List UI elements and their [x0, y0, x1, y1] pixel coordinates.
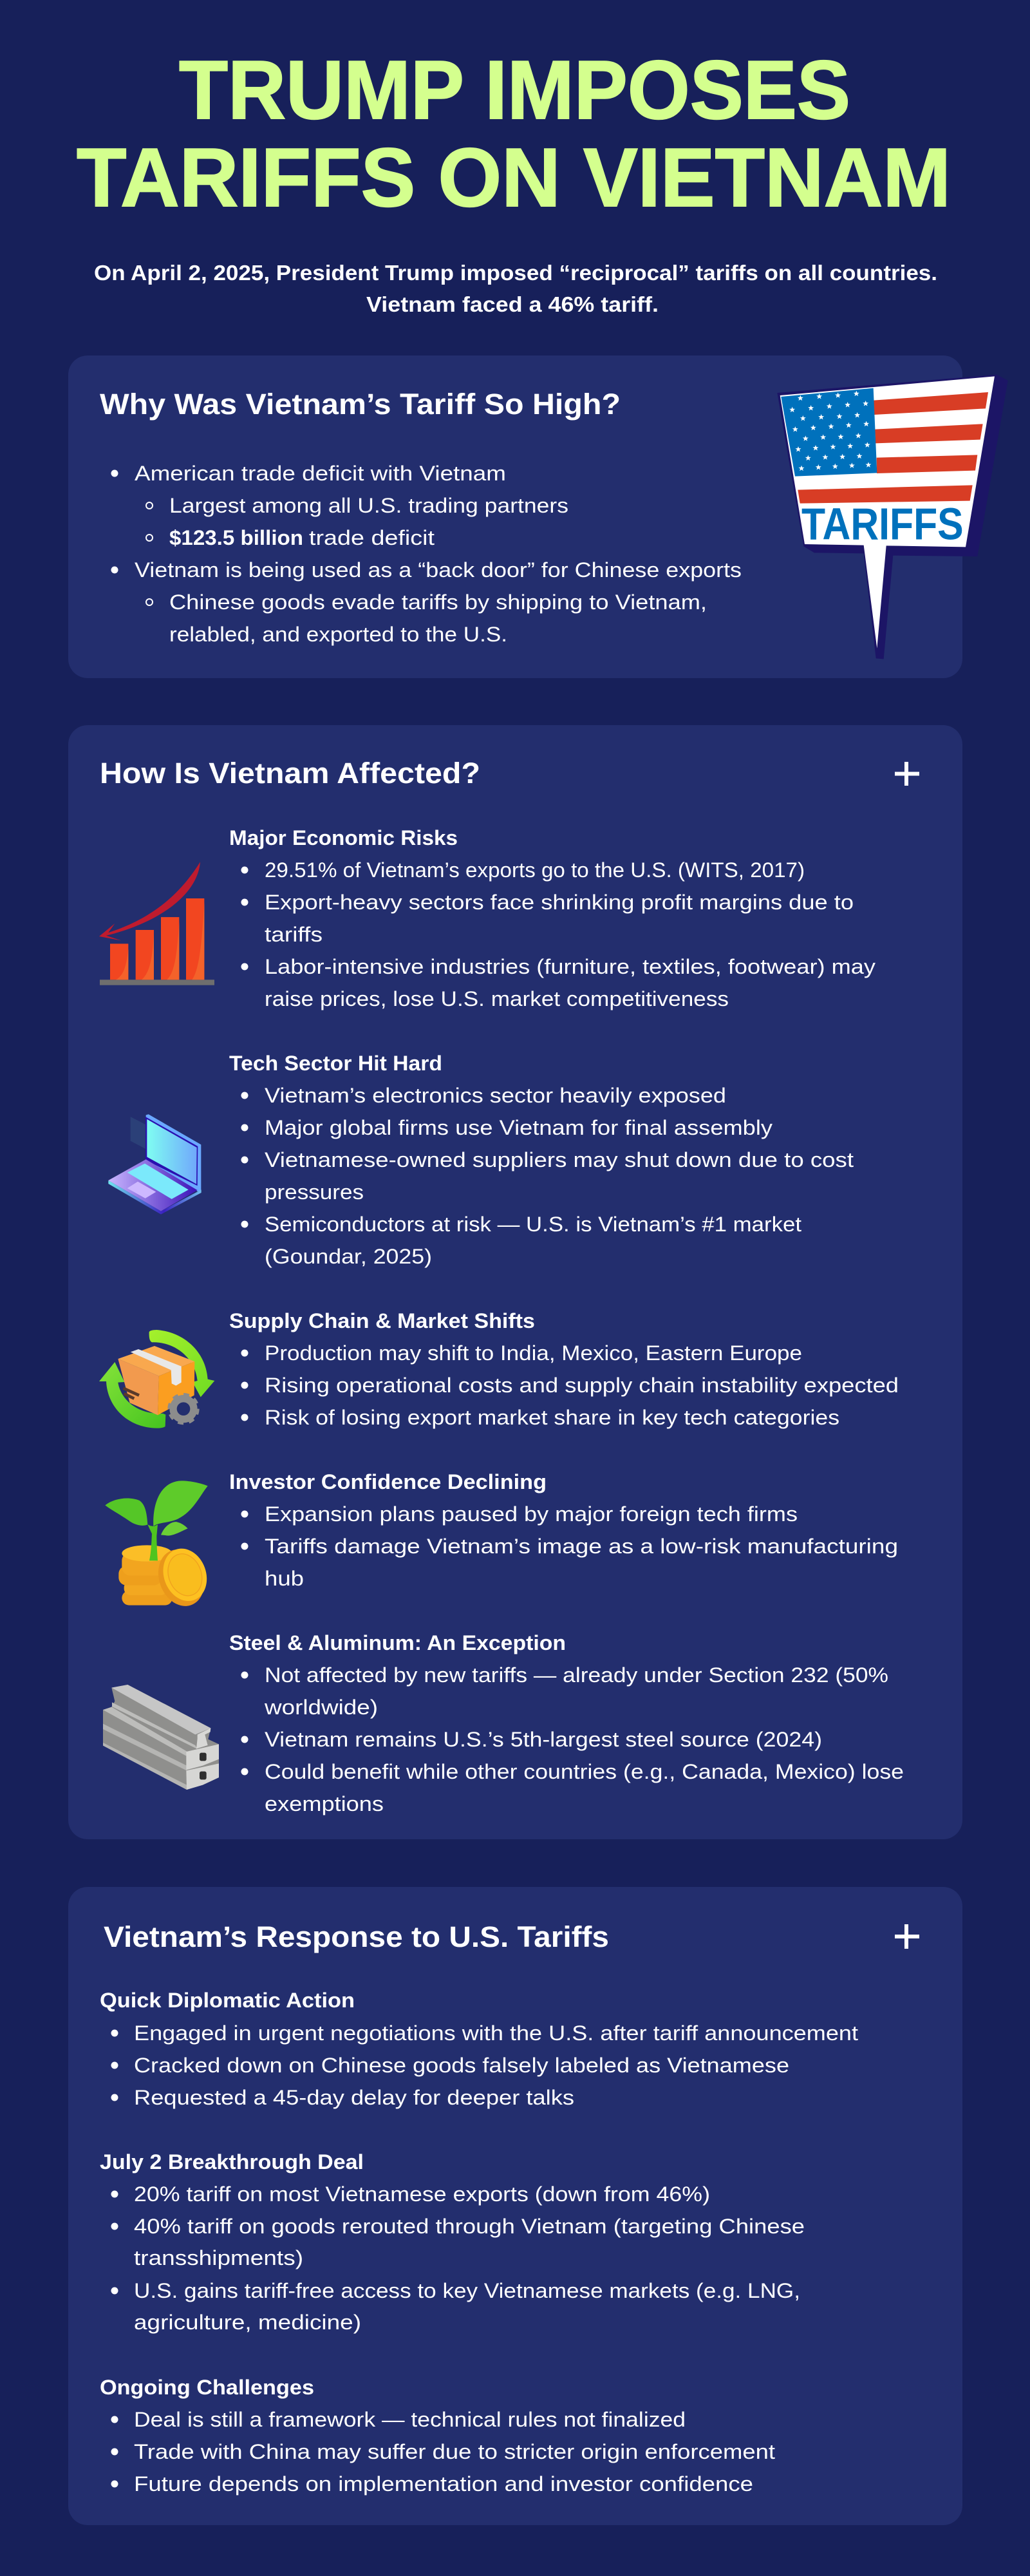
text: tech sector hit hard: Vietnamese-owned suppliers may shut down due to cost	[265, 1148, 854, 1171]
text: steel and aluminum exception	[229, 1631, 904, 1815]
text: july 2 breakthrough deal: transshipments)	[134, 2246, 303, 2269]
text: investor confidence declining: Tariffs damage Vietnam’s image as a low-risk manufacturing	[265, 1535, 898, 1558]
subtitle: On April 2, 2025, President Trump imposed “reciprocal” tariffs on all countries.	[94, 261, 937, 285]
text: major economic risks: tariffs	[265, 923, 323, 946]
text: tech sector hit hard	[229, 1052, 854, 1268]
text: steel and aluminum exception: exemptions	[265, 1792, 384, 1815]
text: major economic risks: Major Economic Risks	[229, 826, 458, 849]
subtitle: Vietnam faced a 46% tariff.	[366, 292, 659, 316]
panel: vietnam's response	[68, 1887, 962, 2525]
text: quick diplomatic action: Requested a 45-day delay for deeper talks	[134, 2086, 574, 2109]
text: supply chain and market shifts: Supply Chain & Market Shifts	[229, 1309, 535, 1332]
text: quick diplomatic action: Engaged in urgent negotiations with the U.S. after tariff announcement	[134, 2022, 858, 2045]
text: steel and aluminum exception: Could benefit while other countries (e.g., Canada, Mexico) lose	[265, 1760, 904, 1783]
title: TRUMP IMPOSES	[179, 44, 850, 137]
title	[77, 44, 951, 224]
text: supply chain and market shifts: Rising operational costs and supply chain instability expected	[265, 1374, 899, 1397]
icon: tariffs flag sign: TARIFFS	[801, 499, 964, 549]
text: steel and aluminum exception: Steel & Aluminum: An Exception	[229, 1631, 566, 1654]
text: ongoing challenges: Future depends on implementation and investor confidence	[134, 2472, 753, 2496]
text: steel and aluminum exception: Not affected by new tariffs — already under Section 232 (50%	[265, 1663, 888, 1687]
icon: steel beams	[103, 1685, 219, 1790]
text: ongoing challenges	[100, 2376, 775, 2496]
text: ongoing challenges: Trade with China may suffer due to stricter origin enforcement	[134, 2440, 775, 2463]
text: major economic risks: raise prices, lose U.S. market competitiveness	[265, 987, 729, 1010]
heading: vietnam's response: Vietnam’s Response to U.S. Tariffs	[104, 1920, 609, 1953]
text: july 2 breakthrough deal: agriculture, medicine)	[134, 2311, 361, 2334]
text: investor confidence declining: Expansion plans paused by major foreign tech firms	[265, 1502, 798, 1526]
text: quick diplomatic action	[100, 1989, 858, 2109]
text: ongoing challenges: Ongoing Challenges	[100, 2376, 314, 2399]
text: july 2 breakthrough deal	[100, 2150, 805, 2334]
heading: how is vietnam affected: How Is Vietnam Affected?	[100, 757, 480, 790]
title: TARIFFS ON VIETNAM	[77, 131, 951, 224]
text: ongoing challenges: Deal is still a framework — technical rules not finalized	[134, 2408, 686, 2431]
text: investor confidence declining: Investor Confidence Declining	[229, 1470, 547, 1493]
text: major economic risks: Export-heavy sectors face shrinking profit margins due to	[265, 891, 854, 914]
list: reasons: $123.5 billion	[169, 526, 303, 549]
text: tech sector hit hard: (Goundar, 2025)	[265, 1245, 432, 1268]
text: july 2 breakthrough deal: 20% tariff on most Vietnamese exports (down from 46%)	[134, 2183, 710, 2206]
list: reasons: American trade deficit with Vietnam	[135, 462, 506, 485]
text: tech sector hit hard: Tech Sector Hit Hard	[229, 1052, 442, 1075]
text: tech sector hit hard: Vietnam’s electronics sector heavily exposed	[265, 1084, 726, 1107]
text: supply chain and market shifts	[229, 1309, 899, 1429]
list: reasons: relabled, and exported to the U.S.	[169, 623, 507, 646]
subtitle	[94, 261, 937, 316]
text: major economic risks: 29.51% of Vietnam’s exports go to the U.S. (WITS, 2017)	[265, 858, 805, 882]
icon: laptop	[108, 1114, 201, 1215]
text: steel and aluminum exception: Vietnam remains U.S.’s 5th-largest steel source (2024)	[265, 1728, 822, 1751]
text: investor confidence declining	[229, 1470, 898, 1590]
icon: tariffs flag sign	[777, 375, 1008, 659]
text: july 2 breakthrough deal: U.S. gains tariff-free access to key Vietnamese markets (e.g. LNG,	[134, 2279, 800, 2302]
icon: falling bar chart	[99, 862, 214, 985]
text: july 2 breakthrough deal: July 2 Breakthrough Deal	[100, 2150, 364, 2174]
icon: plus	[895, 762, 919, 786]
text: steel and aluminum exception: worldwide)	[264, 1696, 378, 1719]
panel: how is vietnam affected	[68, 725, 962, 1839]
text: major economic risks	[229, 826, 876, 1010]
list: reasons: Vietnam is being used as a “back door” for Chinese exports	[135, 558, 742, 582]
text: investor confidence declining: hub	[265, 1567, 304, 1590]
text: tech sector hit hard: pressures	[265, 1180, 364, 1204]
list: reasons: Chinese goods evade tariffs by shipping to Vietnam,	[169, 591, 707, 614]
text: quick diplomatic action: Cracked down on Chinese goods falsely labeled as Vietnamese	[134, 2054, 789, 2077]
list: reasons	[111, 462, 742, 646]
text: tech sector hit hard: Semiconductors at risk — U.S. is Vietnam’s #1 market	[265, 1213, 801, 1236]
list: reasons: trade deficit	[309, 526, 435, 549]
icon: plus	[895, 1924, 919, 1949]
heading: why was the tariff so high: Why Was Vietnam’s Tariff So High?	[100, 388, 621, 421]
text: quick diplomatic action: Quick Diplomatic Action	[100, 1989, 355, 2012]
list: reasons: Largest among all U.S. trading partners	[169, 494, 568, 517]
icon: supply chain box with arrows and gear	[99, 1330, 214, 1428]
icon: sprout on coins	[105, 1481, 214, 1613]
text: july 2 breakthrough deal: 40% tariff on goods rerouted through Vietnam (targeting Chinese	[134, 2215, 805, 2238]
panel: why was the tariff so high	[68, 355, 962, 678]
text: supply chain and market shifts: Production may shift to India, Mexico, Eastern Europe	[265, 1341, 802, 1365]
text: major economic risks: Labor-intensive industries (furniture, textiles, footwear) may	[265, 955, 876, 978]
text: supply chain and market shifts: Risk of losing export market share in key tech categories	[265, 1406, 839, 1429]
text: tech sector hit hard: Major global firms use Vietnam for final assembly	[265, 1116, 772, 1139]
